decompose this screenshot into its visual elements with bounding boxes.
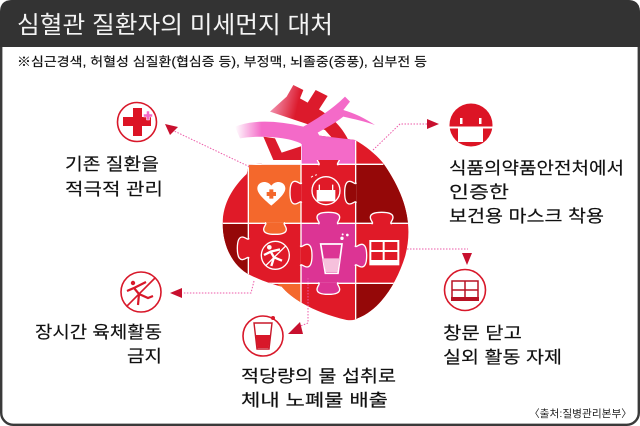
arrow: to mask: [373, 119, 439, 150]
label: mask: [449, 159, 624, 226]
label: water: [241, 367, 396, 410]
icon: window circle: [444, 270, 486, 310]
label: water: 적당량의 물 섭취로: [241, 367, 396, 386]
heart illustration: [222, 136, 408, 320]
label: existing disease: 기존 질환을: [65, 155, 159, 174]
puzzle knobs: [237, 153, 393, 294]
icon: glass of water: [321, 233, 349, 273]
label: no exercise: [35, 323, 162, 366]
label: existing disease: [65, 155, 163, 199]
label: no exercise: 금지: [127, 347, 162, 366]
icon: heart with cross: [257, 182, 285, 206]
subtitle note: ※심근경색, 허혈성 심질환(협심증 등), 부정맥, 뇌졸중(중풍), 심부전 등: [17, 55, 427, 69]
source credit: 〈출처:질병관리본부〉: [529, 408, 632, 420]
piece: dark bottom right: [356, 283, 394, 320]
icon: no running: [261, 241, 289, 269]
pink artery band: [235, 97, 375, 160]
label: close windows: 실외 활동 자제: [443, 348, 562, 367]
icon: medical cross: [118, 102, 156, 142]
icon: mask face: [311, 175, 340, 205]
heart puzzle pieces: [222, 136, 408, 320]
title: 심혈관 질환자의 미세먼지 대처: [17, 12, 333, 39]
icon: no running circle: [121, 272, 161, 312]
label: close windows: [443, 324, 562, 367]
heart vessels (red): [263, 85, 380, 160]
piece: dark left: [222, 223, 248, 274]
piece: orange heart: [248, 164, 301, 223]
piece: pink top: [301, 133, 356, 164]
label: existing disease: 적극적 관리: [65, 180, 163, 199]
label: mask: 식품의약품안전처에서: [449, 159, 624, 178]
arrow: to no running: [170, 281, 254, 298]
label: mask: 인증한: [449, 183, 509, 202]
seams: [222, 141, 410, 320]
piece: magenta centre: [301, 223, 356, 283]
label: no exercise: 장시간 육체활동: [35, 323, 162, 342]
label: mask: 보건용 마스크 착용: [449, 207, 604, 226]
arrow: to medical cross: [165, 124, 250, 167]
icon: glass circle: [243, 316, 283, 356]
label: water: 체내 노폐물 배출: [241, 391, 388, 410]
arrow: to glass: [288, 278, 308, 334]
icon: window: [369, 240, 399, 265]
title bar: [0, 0, 640, 47]
piece: dark right: [356, 164, 408, 223]
label: close windows: 창문 닫고: [443, 324, 522, 343]
arrow: to window: [407, 249, 472, 265]
piece: orange low: [278, 284, 301, 302]
icon: mask: [448, 104, 494, 146]
